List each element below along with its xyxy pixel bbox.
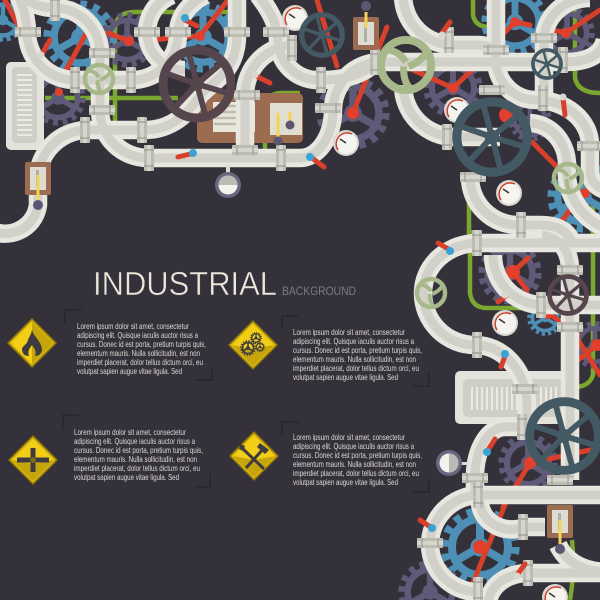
text block 4: elementum mauris. Nulla sollicitudin, est non: [293, 460, 416, 469]
white gauges: [282, 5, 568, 600]
text block 3: volutpat sapien augue vitae ligula. Sed: [74, 473, 179, 482]
bracket frame 1: [65, 310, 212, 380]
plate levers: [274, 112, 294, 146]
sign: gears: [229, 321, 277, 369]
valve box top: [353, 1, 379, 50]
title: INDUSTRIAL: [93, 265, 277, 302]
text block 1: volutpat sapien augue vitae ligula. Sed: [77, 367, 182, 376]
bracket frame 4: [282, 422, 429, 492]
text block 1: elementum mauris. Nulla sollicitudin, est non: [77, 349, 200, 358]
brown control plate: [197, 93, 303, 143]
text block 3: elementum mauris. Nulla sollicitudin, est non: [74, 455, 197, 464]
text block 2: volutpat sapien augue vitae ligula. Sed: [293, 373, 398, 382]
text block 3: [74, 428, 203, 482]
bracket frame 2: [282, 316, 429, 386]
text block 3: adipiscing elit. Quisque iaculis auctor risus a: [74, 437, 195, 446]
bracket frame 3: [63, 415, 210, 487]
text block 2: adipiscing elit. Quisque iaculis auctor risus a: [293, 337, 414, 346]
sign: flame: [8, 319, 56, 367]
text block 1: [77, 322, 206, 376]
text block 4: [293, 433, 422, 487]
text block 4: imperdiet placerat, dolor tellus dictum orci, eu: [293, 469, 419, 478]
text block 4: volutpat sapien augue vitae ligula. Sed: [293, 478, 398, 487]
subtitle: BACKGROUND: [282, 286, 356, 298]
text block 2: Lorem ipsum dolor sit amet, consectetur: [293, 328, 405, 337]
sign: crossing pipes: [9, 436, 57, 484]
left radiator box: [6, 62, 44, 150]
gauge: purple half right: [436, 450, 469, 476]
text block 2: cursus. Donec id est porta, pretium turpis quis,: [293, 346, 422, 355]
text block 3: imperdiet placerat, dolor tellus dictum orci, eu: [74, 464, 200, 473]
text block 1: cursus. Donec id est porta, pretium turpis quis,: [77, 340, 206, 349]
text block 4: adipiscing elit. Quisque iaculis auctor risus a: [293, 442, 414, 451]
text block 1: Lorem ipsum dolor sit amet, consectetur: [77, 322, 189, 331]
wheels: [85, 15, 598, 470]
text block 4: cursus. Donec id est porta, pretium turpis quis,: [293, 451, 422, 460]
right radiator box: [455, 371, 573, 424]
valve box left: [25, 162, 51, 210]
text block 3: cursus. Donec id est porta, pretium turpis quis,: [74, 446, 203, 455]
valve box bottom right: [547, 505, 573, 554]
text block 2: [293, 328, 422, 382]
text block 4: Lorem ipsum dolor sit amet, consectetur: [293, 433, 405, 442]
text block 3: Lorem ipsum dolor sit amet, consectetur: [74, 428, 186, 437]
text block 1: adipiscing elit. Quisque iaculis auctor risus a: [77, 331, 198, 340]
text block 1: imperdiet placerat, dolor tellus dictum orci, eu: [77, 358, 203, 367]
gauge: purple half under main pipe: [215, 165, 241, 198]
text block 2: elementum mauris. Nulla sollicitudin, est non: [293, 355, 416, 364]
sign: hammer and wrench: [230, 432, 278, 480]
text block 2: imperdiet placerat, dolor tellus dictum orci, eu: [293, 364, 419, 373]
